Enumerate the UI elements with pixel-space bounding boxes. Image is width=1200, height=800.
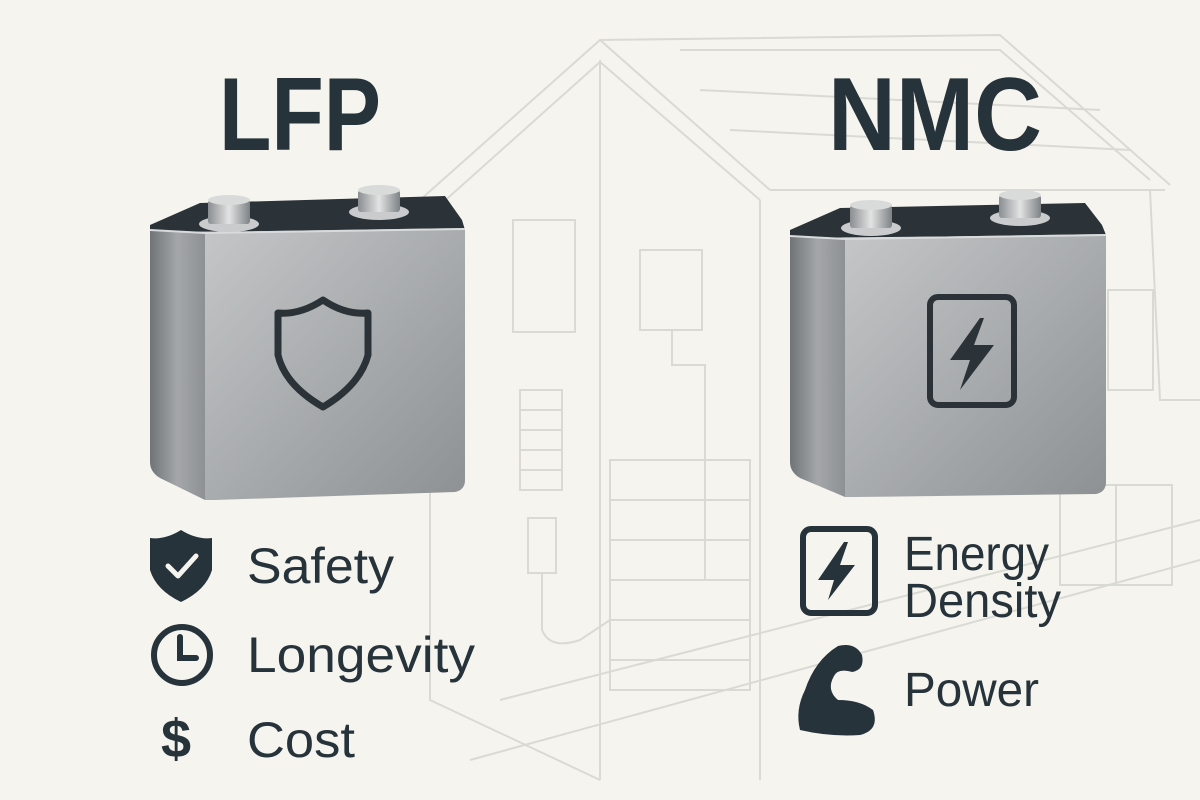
- icon: clock: [154, 627, 210, 683]
- feature: Cost: Cost: [247, 712, 355, 768]
- icon: dollar: $: [161, 709, 191, 769]
- icon: shield on battery: [278, 300, 368, 407]
- icon: lightning box on battery: [930, 297, 1014, 405]
- feature: Energy Density: Density: [904, 575, 1061, 628]
- feature: Cost: [161, 709, 355, 769]
- feature: Energy Density: Energy: [904, 528, 1049, 581]
- battery: LFP: [150, 185, 465, 500]
- feature: Safety: [150, 530, 394, 602]
- feature: Longevity: [154, 627, 475, 683]
- title: LFP: LFP: [219, 57, 381, 173]
- feature: Power: [798, 645, 1039, 735]
- icon: shield check: [150, 530, 212, 602]
- battery: NMC: [790, 190, 1106, 497]
- icon: flexed arm: [798, 645, 875, 735]
- title: NMC: NMC: [828, 57, 1042, 173]
- feature: Energy Density: [803, 528, 1061, 628]
- feature: Power: Power: [904, 664, 1039, 717]
- icon: lightning box: [803, 529, 875, 613]
- feature: Safety: Safety: [247, 538, 394, 594]
- feature: Longevity: Longevity: [247, 627, 475, 683]
- background: house sketch: [420, 35, 1200, 780]
